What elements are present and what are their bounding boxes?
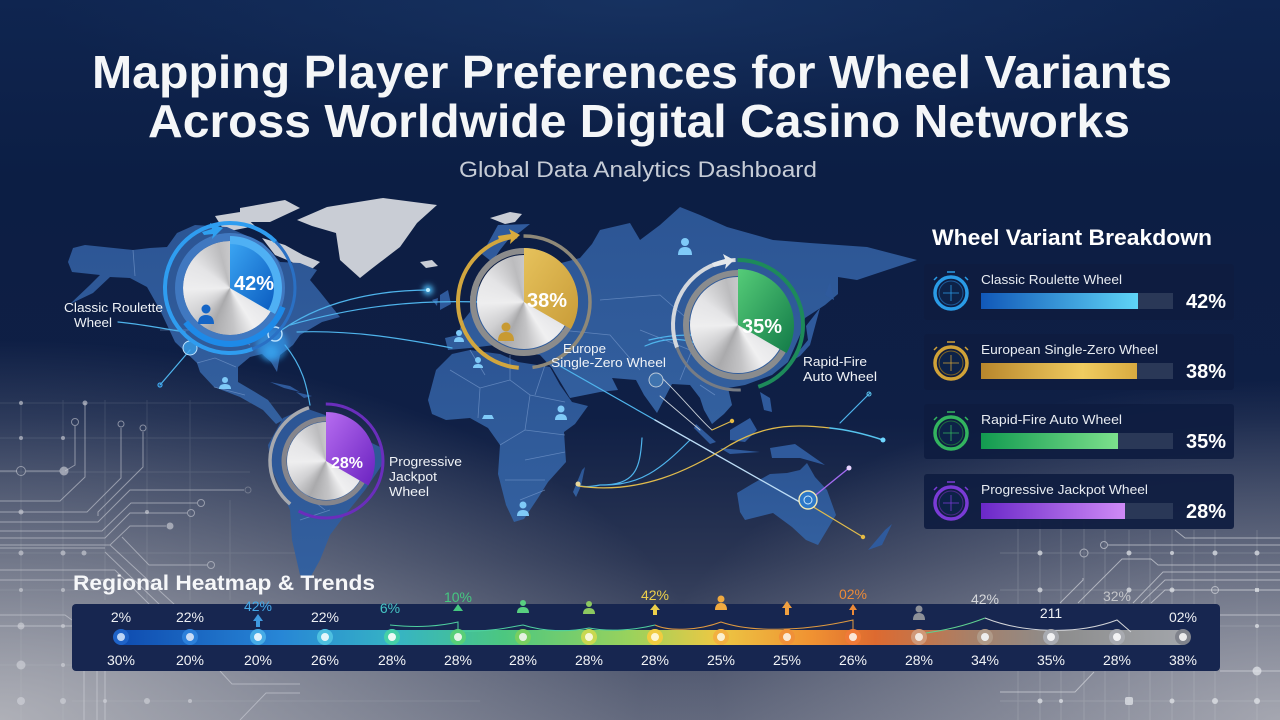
trend arrows and persons: [253, 596, 925, 627]
bottom values: 38%: [1169, 652, 1197, 668]
heading: Regional Heatmap & Trends: Regional Heatmap & Trends: [73, 572, 375, 595]
bottom values: 20%: [176, 652, 204, 668]
bottom values: 30%: [107, 652, 135, 668]
top values: 211: [1040, 605, 1062, 621]
top values: 42%: [244, 598, 272, 614]
top values: 42%: [641, 587, 669, 603]
card: Rapid-Fire Auto: [924, 404, 1234, 459]
top values: 02%: [1169, 609, 1197, 625]
wheel: Classic Roulette 42%: [163, 221, 296, 355]
wheel: Progressive Jackpot 28%: 28%: [331, 455, 363, 472]
card: Rapid-Fire Auto: 35%: [1186, 431, 1226, 453]
bottom values: 28%: [575, 652, 603, 668]
map labels: Europe: [563, 341, 606, 356]
map: Madagascar: [573, 467, 585, 497]
top values: 22%: [176, 609, 204, 625]
card: European Single-Zero: 38%: [1186, 361, 1226, 383]
map: UK and Scandinavia: [432, 224, 530, 310]
map: North America: [68, 225, 340, 424]
map labels: Single-Zero Wheel: [551, 355, 666, 370]
panel: wheel variant breakdown: [924, 264, 1234, 529]
heat gradient bar: [121, 630, 1183, 645]
panel: regional heatmap: [72, 586, 1220, 671]
title: Across Worldwide Digital Casino Networks: [148, 95, 1130, 147]
map labels: Rapid-Fire: [803, 354, 867, 369]
map labels: Classic Roulette: [64, 300, 163, 315]
top values: 22%: [311, 609, 339, 625]
wheel: European Single-Zero 38%: 38%: [527, 290, 567, 312]
map: Eurasia: [445, 207, 917, 424]
subtitle: Global Data Analytics Dashboard: [459, 157, 817, 182]
bottom values: 28%: [641, 652, 669, 668]
top values: 42%: [971, 591, 999, 607]
map: Greenland and Arctic: [215, 198, 522, 278]
bottom values: 28%: [509, 652, 537, 668]
bottom values: 28%: [1103, 652, 1131, 668]
map labels: Jackpot: [389, 469, 437, 484]
map labels: Wheel: [389, 484, 429, 499]
map person icons: [219, 238, 692, 516]
card: Rapid-Fire Auto: Rapid-Fire Auto Wheel: [981, 412, 1122, 427]
top values: 32%: [1103, 588, 1131, 604]
map: South America: [268, 408, 384, 578]
top values: 10%: [444, 589, 472, 605]
wheel: Rapid-Fire Auto 35%: [671, 254, 805, 392]
trend lines: [390, 618, 1131, 634]
connection nodes: [158, 285, 886, 539]
title: Mapping Player Preferences for Wheel Variants: [92, 46, 1172, 98]
wheel: Rapid-Fire Auto 35%: 35%: [742, 316, 782, 338]
card: Classic Roulette: Classic Roulette Wheel: [981, 272, 1122, 287]
bottom values: 28%: [444, 652, 472, 668]
card: European Single-Zero: European Single-Zero Wheel: [981, 342, 1158, 357]
top values: [111, 586, 1197, 625]
card: Classic Roulette: [924, 264, 1234, 320]
map: country borders: [133, 250, 740, 520]
wheel: Progressive Jackpot 28%: [268, 402, 384, 520]
map: islands of Asia-Pacific: [694, 282, 892, 550]
bottom values: 28%: [378, 652, 406, 668]
card: European Single-Zero: [924, 334, 1234, 390]
bottom values: 26%: [839, 652, 867, 668]
map labels: Progressive: [389, 454, 462, 469]
card: Classic Roulette: 42%: [1186, 291, 1226, 313]
bottom values: 26%: [311, 652, 339, 668]
map labels: Wheel: [74, 315, 112, 330]
world map: [68, 198, 917, 578]
bottom values: 28%: [905, 652, 933, 668]
circuit pattern: right: [1000, 520, 1280, 720]
map: Caribbean: [270, 382, 312, 398]
map: Australia: [737, 463, 836, 545]
title: [92, 46, 1172, 147]
bottom values: 20%: [244, 652, 272, 668]
map labels: [64, 300, 877, 499]
wheel: European Single-Zero 38%: [456, 229, 592, 370]
bottom values: 25%: [707, 652, 735, 668]
circuit pattern: left: [0, 400, 480, 720]
connection lines: [118, 290, 883, 537]
card: Progressive Jackpot: [924, 474, 1234, 529]
bottom values: 35%: [1037, 652, 1065, 668]
panel heading: Wheel Variant Breakdown: Wheel Variant Breakdown: [932, 225, 1212, 250]
bottom values: 34%: [971, 652, 999, 668]
bottom values: 25%: [773, 652, 801, 668]
top values: 02%: [839, 586, 867, 602]
card: Progressive Jackpot: Progressive Jackpot Wheel: [981, 482, 1148, 497]
top values: 2%: [111, 609, 131, 625]
map labels: Auto Wheel: [803, 369, 877, 384]
map: Africa: [428, 350, 588, 522]
heat nodes: [115, 631, 1189, 643]
bottom values: [107, 652, 1197, 668]
top values: 6%: [380, 600, 400, 616]
card: Progressive Jackpot: 28%: [1186, 501, 1226, 523]
wheel: Classic Roulette 42%: 42%: [234, 273, 274, 295]
